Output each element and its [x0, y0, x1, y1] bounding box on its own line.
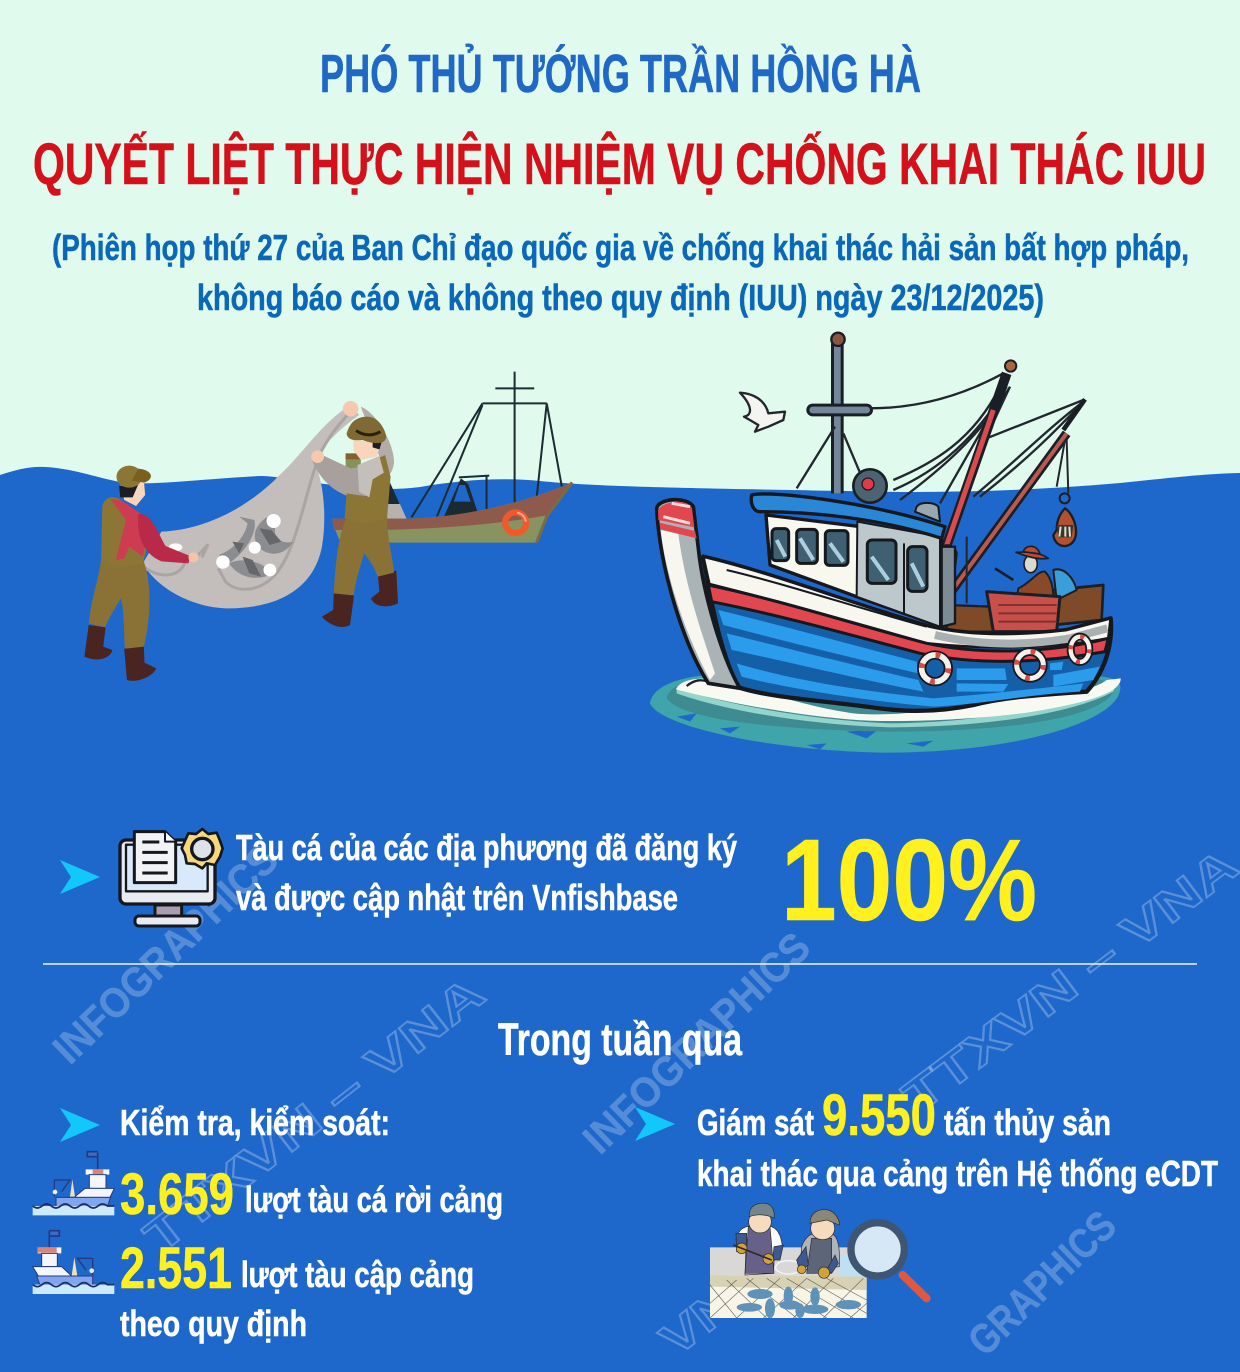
fish: [169, 514, 293, 578]
icon: ship arriving at port: [33, 1231, 114, 1294]
crates and sailor: [947, 546, 1103, 632]
subtitle: [52, 227, 1189, 318]
title line 1: PHÓ THỦ TƯỚNG TRẦN HỒNG HÀ: [320, 44, 921, 104]
stat: 9.550 tonnes monitored: Giám sát: [697, 1102, 814, 1143]
mast: [797, 333, 1083, 503]
subtitle: không báo cáo và không theo quy định (IUU) ngày 23/12/2025): [197, 277, 1044, 318]
watermarks: TTXVN – VNA: [893, 838, 1240, 1123]
life buoys: [922, 637, 1089, 682]
illustration: workers sorting fish with magnifier: [710, 1203, 927, 1318]
stat text: vessels registered: và được cập nhật trên Vnfishbase: [236, 877, 678, 918]
stat text: vessels registered: [236, 827, 737, 918]
hull: [703, 557, 1111, 711]
cabin: [751, 494, 955, 627]
illustration: large fishing boat: [650, 333, 1121, 753]
illustration: fishermen with net and small boat: [84, 372, 572, 681]
arrow 3: [635, 1107, 675, 1141]
magnifier: [851, 1223, 927, 1298]
icon: ship leaving port: [33, 1152, 114, 1215]
arrow 2: [60, 1108, 100, 1142]
watermarks: GRAPHICS: [959, 1201, 1125, 1364]
arrow 1: [60, 860, 100, 894]
watermarks: TTXVN – VNA: [134, 966, 494, 1263]
stat value 100%: 100%: [781, 815, 1037, 945]
fisherman left: [84, 466, 199, 681]
stat: 3.659 vessels departing: [120, 1162, 503, 1227]
stat: 2.551 vessels arriving: [120, 1236, 474, 1344]
watermarks: [44, 835, 1240, 1366]
stat: 3.659 vessels departing: 3.659: [120, 1162, 234, 1227]
net: [143, 405, 359, 608]
stat: 3.659 vessels departing: lượt tàu cá rời cảng: [245, 1179, 503, 1220]
worker right: [797, 1210, 839, 1278]
stat: 2.551 vessels arriving: theo quy định: [120, 1303, 307, 1344]
fisherman right: [311, 401, 398, 627]
stat text: vessels registered: Tàu cá của các địa phương đã đăng ký: [236, 827, 737, 868]
watermarks: VNA: [650, 1250, 778, 1366]
worker left: [733, 1203, 801, 1275]
stat: 2.551 vessels arriving: 2.551: [120, 1236, 232, 1301]
booms: [942, 360, 1085, 603]
stat: 9.550 tonnes monitored: tấn thủy sản: [944, 1102, 1111, 1143]
background: sea: [0, 467, 1240, 1372]
stat: 9.550 tonnes monitored: [697, 1083, 1218, 1194]
icon: monitor with document and gear: [120, 829, 223, 926]
water foam: [650, 673, 1121, 753]
stat: 9.550 tonnes monitored: 9.550: [822, 1083, 936, 1148]
stat: 2.551 vessels arriving: lượt tàu cập cảng: [241, 1254, 474, 1295]
watermarks: INFOGRAPHICS: [44, 835, 287, 1072]
text: inspections: Kiểm tra, kiểm soát:: [120, 1102, 390, 1143]
life ring: [505, 512, 526, 533]
small boat: [332, 372, 572, 543]
net float: [1053, 508, 1076, 546]
bow post: [657, 500, 740, 688]
seagull: [740, 393, 785, 432]
heading: Trong tuần qua: Trong tuần qua: [498, 1014, 743, 1065]
watermarks: INFOGRAPHICS: [574, 923, 819, 1162]
